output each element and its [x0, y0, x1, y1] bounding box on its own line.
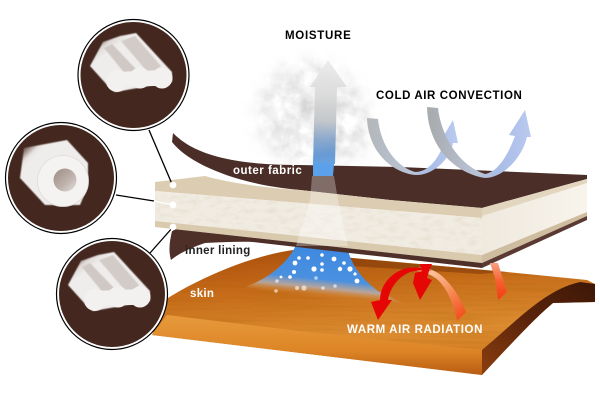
- far right arrow: [490, 263, 507, 300]
- blue band over fabric: [313, 163, 334, 176]
- inner lining curl: [169, 231, 300, 260]
- right warm arc: [410, 267, 466, 321]
- label: moisture: MOISTURE: [285, 30, 351, 42]
- cold air arrow right: [427, 107, 531, 178]
- bottom brown layer: [173, 229, 482, 268]
- detail circle: insulation roll: [6, 122, 116, 234]
- left warm arc arrow: [371, 267, 432, 320]
- skin wood surface: [150, 250, 598, 376]
- steam cloud: [258, 63, 368, 167]
- label: outer fabric: outer fabric: [233, 165, 302, 177]
- detail circle: outer fabric: [78, 20, 189, 130]
- layered fabric block: [155, 176, 587, 268]
- warm air arrows: [371, 263, 507, 321]
- right side face: [482, 179, 587, 255]
- moisture arrow: [296, 60, 348, 246]
- water droplets: [274, 253, 359, 293]
- cream insulation layer: [155, 191, 482, 255]
- outer fabric curl: [172, 133, 587, 208]
- arrow passing through fabric: [296, 176, 348, 246]
- label: cold air convection: COLD AIR CONVECTION: [376, 90, 522, 102]
- top tan layer: [155, 176, 482, 218]
- center down arrow: [413, 264, 432, 300]
- connector lines and dots: [116, 130, 176, 253]
- label: inner lining: inner lining: [185, 245, 251, 257]
- condensation cone: [245, 245, 403, 303]
- skin right curved edge: [482, 282, 595, 375]
- bottom tan layer: [155, 221, 482, 263]
- cold air arrow left: [367, 118, 458, 175]
- skin front edge: [152, 315, 482, 375]
- label: warm air radiation: WARM AIR RADIATION: [347, 324, 483, 336]
- label: skin: skin: [190, 288, 214, 300]
- detail circle: inner lining: [56, 238, 168, 350]
